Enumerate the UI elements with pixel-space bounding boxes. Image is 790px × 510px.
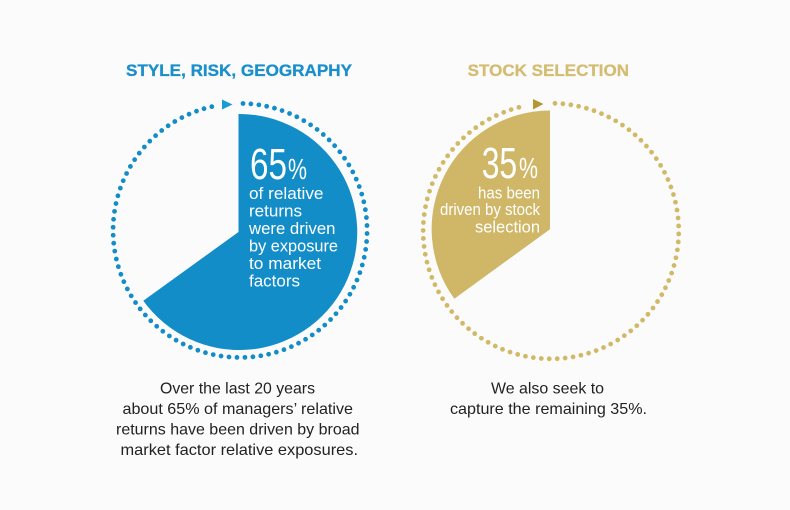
pie wedge: 65 percent [143, 114, 357, 350]
pie text: blue wedge description: to market [249, 255, 321, 273]
pie text: gold wedge description: driven by stock [440, 201, 541, 219]
pie text: blue wedge description: were driven [248, 220, 336, 238]
icon: gold arrowhead [533, 99, 544, 110]
stat: 65%: % [288, 154, 307, 186]
stat: 65%: 65 [250, 140, 287, 189]
caption: we also seek: capture the remaining 35%. [450, 401, 647, 418]
caption: over the last 20 years [116, 380, 360, 459]
dotted ring: blue [113, 104, 367, 357]
pie text: blue wedge description: by exposure [249, 238, 338, 256]
pie text: blue wedge description: factors [249, 273, 300, 291]
pie text: blue wedge description [248, 185, 338, 291]
caption: over the last 20 years: market factor relative exposures. [120, 442, 358, 459]
pie text: gold wedge description: selection [475, 219, 540, 237]
pie text: gold wedge description [440, 184, 541, 237]
caption: over the last 20 years: about 65% of managers’ relative [122, 401, 353, 418]
pie text: gold wedge description: has been [478, 184, 540, 202]
caption: we also seek [450, 380, 647, 418]
panel: stock selection [423, 62, 679, 418]
pie text: blue wedge description: of relative [249, 185, 324, 203]
heading: stock selection: STOCK SELECTION [468, 62, 629, 80]
pie text: blue wedge description: returns [249, 203, 302, 221]
caption: we also seek: We also seek to [491, 380, 604, 397]
dotted ring: gold [423, 103, 679, 359]
stat: 35%: 35 [482, 139, 517, 188]
stat: 35%: % [519, 153, 538, 185]
heading: style, risk, geography: STYLE, RISK, GEOGRAPHY [126, 62, 352, 80]
caption: over the last 20 years: returns have been driven by broad [116, 422, 360, 439]
panel: style, risk, geography [113, 62, 367, 459]
pie wedge: 35 percent [432, 110, 550, 299]
icon: blue arrowhead [222, 100, 232, 110]
caption: over the last 20 years: Over the last 20 years [160, 380, 315, 397]
